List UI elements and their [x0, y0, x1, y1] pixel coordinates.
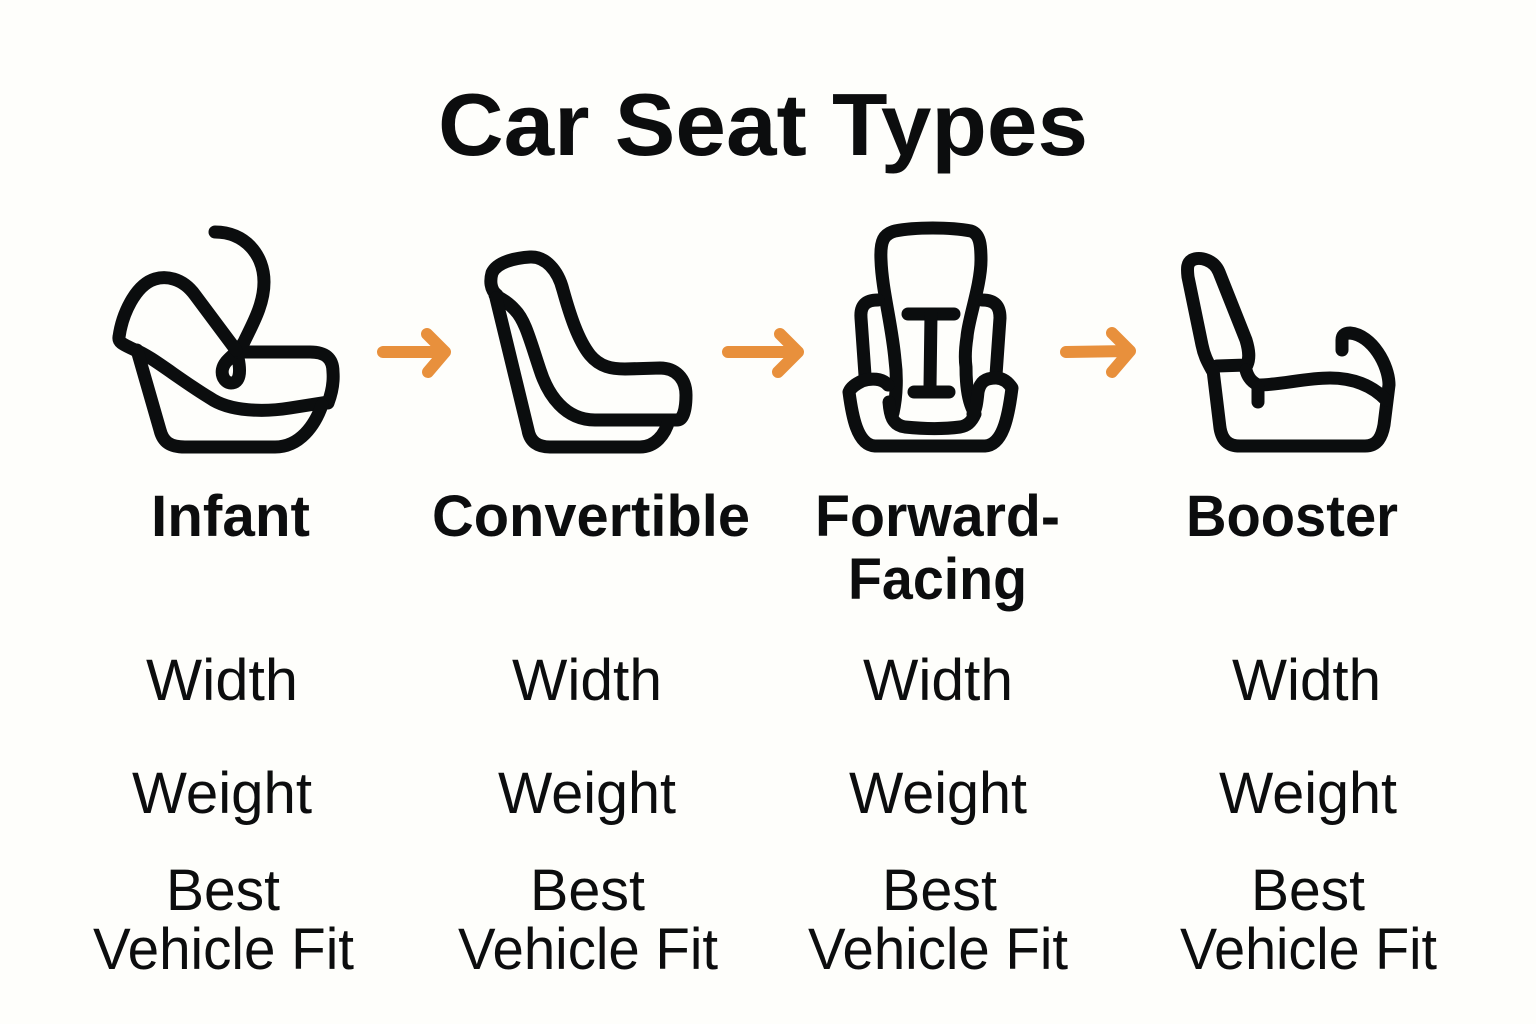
row: best vehicle fit: Vehicle Fit: [808, 917, 1068, 982]
row: best vehicle fit: Best: [166, 858, 280, 923]
icon: booster seat: [1187, 258, 1389, 446]
label: Forward-Facing: Facing: [848, 547, 1027, 612]
row: width: Width: [1232, 648, 1381, 713]
icon: infant carrier seat: [119, 232, 333, 447]
row: best vehicle fit: Best: [530, 858, 645, 923]
label: Forward-Facing: Forward-: [815, 484, 1060, 549]
arrow: convertible to forward-facing: [728, 334, 798, 372]
row: best vehicle fit: [808, 858, 1068, 982]
label: Infant: Infant: [151, 484, 310, 549]
icon: convertible seat: [491, 257, 686, 447]
row: best vehicle fit: Best: [1251, 858, 1365, 923]
row: best vehicle fit: Best: [882, 858, 997, 923]
row: weight: Weight: [498, 761, 676, 826]
row: width: Width: [863, 648, 1013, 713]
row: weight: Weight: [1219, 761, 1397, 826]
row: weight: Weight: [849, 761, 1027, 826]
label: Forward-Facing: [815, 484, 1060, 612]
column: infant: [93, 232, 354, 982]
arrow: forward-facing to booster: [1066, 333, 1130, 372]
row: best vehicle fit: [93, 858, 354, 982]
row: best vehicle fit: Vehicle Fit: [1180, 917, 1437, 982]
row: width: Width: [146, 648, 298, 713]
row: best vehicle fit: [458, 858, 718, 982]
row: best vehicle fit: Vehicle Fit: [93, 917, 354, 982]
row: weight: Weight: [132, 761, 312, 826]
column: booster: [1180, 258, 1437, 982]
row: best vehicle fit: [1180, 858, 1437, 982]
title: Car Seat Types: [438, 75, 1088, 174]
column: convertible: [432, 257, 750, 982]
row: width: Width: [512, 648, 662, 713]
label: Booster: Booster: [1186, 484, 1398, 549]
row: best vehicle fit: Vehicle Fit: [458, 917, 718, 982]
label: Convertible: Convertible: [432, 484, 750, 549]
icon: forward-facing seat: [849, 228, 1012, 446]
arrow: infant to convertible: [383, 334, 445, 372]
column: forward-facing: [808, 228, 1068, 982]
